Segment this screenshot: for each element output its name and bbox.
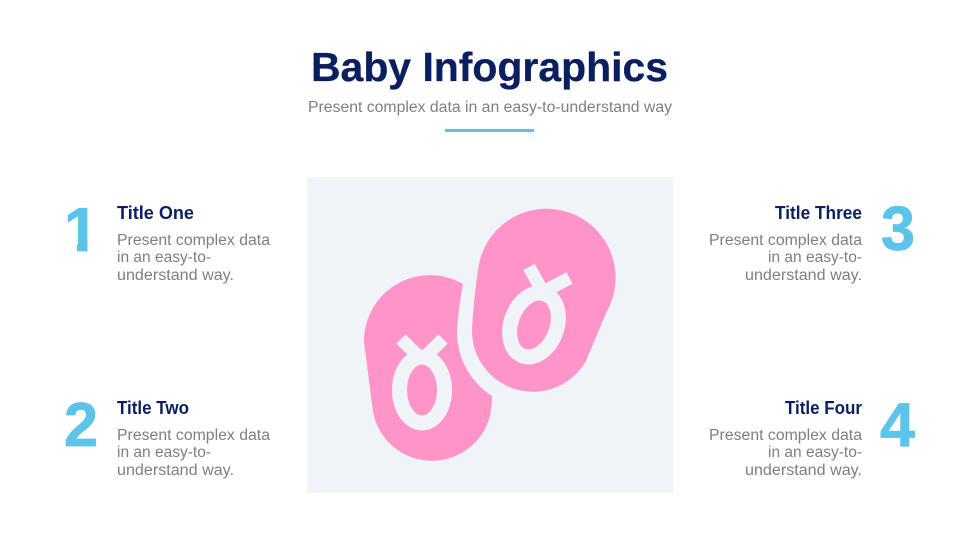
body text: in an easy-to-	[117, 444, 211, 461]
left sole ring and prongs	[400, 339, 444, 423]
heading: Title Three: Title Three	[775, 202, 862, 223]
number 2: 2	[64, 391, 98, 460]
heading: Title Two: Title Two	[117, 397, 189, 418]
item 1	[68, 206, 270, 284]
number 1: 1	[64, 196, 98, 265]
body text: Present complex data	[117, 427, 270, 444]
body text: Present complex data	[117, 232, 270, 249]
icon: right baby sole	[472, 209, 616, 392]
body text: understand way.	[117, 462, 234, 479]
heading: Title One: Title One	[117, 202, 194, 223]
icon: left baby sole	[364, 275, 492, 461]
body text: in an easy-to-	[768, 249, 862, 266]
item 4	[709, 391, 916, 479]
title underline accent	[445, 129, 534, 132]
item 3	[709, 195, 915, 284]
right sole ring and prongs	[501, 267, 570, 364]
body text: Present complex data	[709, 232, 862, 249]
number 4: 4	[880, 391, 916, 460]
subtitle: Present complex data in an easy-to-understand way	[308, 99, 672, 116]
number 3: 3	[881, 195, 915, 264]
item 2	[64, 391, 270, 479]
heading: Title Four: Title Four	[785, 397, 862, 418]
body text: understand way.	[745, 462, 862, 479]
panel: baby feet illustration	[307, 177, 673, 493]
body text: understand way.	[117, 267, 234, 284]
title: Baby Infographics	[311, 44, 668, 90]
body text: in an easy-to-	[117, 249, 211, 266]
body text: understand way.	[745, 267, 862, 284]
body text: Present complex data	[709, 427, 862, 444]
body text: in an easy-to-	[768, 444, 862, 461]
